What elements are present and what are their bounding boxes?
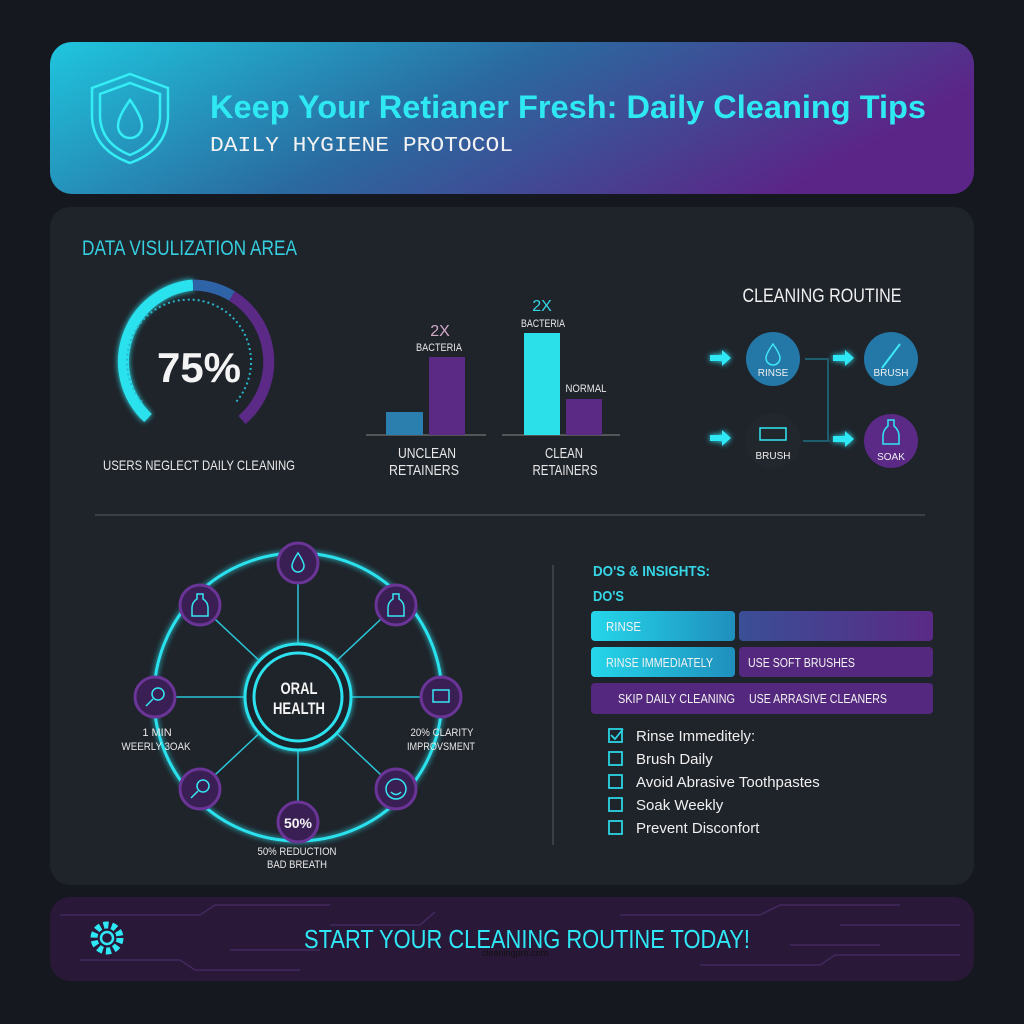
table rows: RINSE xyxy=(606,619,641,634)
gauge value: 75% xyxy=(157,344,241,391)
table rows: USE ARRASIVE CLEANERS xyxy=(749,691,887,706)
gauge chart xyxy=(103,285,295,473)
radial diagram: oral health: BAD BREATH xyxy=(267,859,327,871)
checklist: Prevent Disconfort xyxy=(636,820,760,837)
bar chart: 2X xyxy=(532,298,552,315)
checklist: Soak Weekly xyxy=(636,797,724,814)
radial diagram: oral health: 50% xyxy=(284,815,313,831)
radial diagram: oral health: 1 MIN xyxy=(142,727,172,739)
step: rinse: RINSE xyxy=(758,368,789,379)
radial diagram: oral health: ORAL xyxy=(280,679,318,698)
footer call to action xyxy=(50,897,974,981)
step: soak: SOAK xyxy=(877,452,905,463)
bar chart: CLEAN xyxy=(545,445,583,462)
radial diagram: oral health: HEALTH xyxy=(273,699,325,718)
do's and insights panel xyxy=(591,563,933,837)
cleaning routine flow: CLEANING ROUTINE xyxy=(742,286,902,307)
main panel xyxy=(50,207,974,885)
section heading: data visualization: DATA VISULIZATION AREA xyxy=(82,237,297,260)
table rows: SKIP DAILY CLEANING xyxy=(618,691,735,706)
subtitle: DAILY HYGIENE PROTOCOL xyxy=(210,135,513,158)
bar chart: RETAINERS xyxy=(389,462,459,479)
bar chart: BACTERIA xyxy=(521,318,566,330)
step: rinse xyxy=(746,332,800,386)
bar chart: BACTERIA xyxy=(416,342,463,354)
header banner xyxy=(50,42,974,194)
cta text: START YOUR CLEANING ROUTINE TODAY! xyxy=(304,924,750,954)
table rows xyxy=(591,611,933,714)
step: brush xyxy=(745,413,801,469)
radial diagram: oral health: 20% CLARITY xyxy=(410,727,474,739)
radial diagram: oral health: IMPROVSMENT xyxy=(407,741,475,753)
checklist: Avoid Abrasive Toothpastes xyxy=(636,774,820,791)
checklist: Brush Daily xyxy=(636,751,713,768)
icon: shield with drop xyxy=(92,74,168,163)
icon: gear xyxy=(94,925,120,951)
bar chart: RETAINERS xyxy=(532,462,598,479)
footer call to action: cleaningpro.com xyxy=(482,948,548,958)
bar chart: 2X xyxy=(430,323,450,340)
do's and insights panel: DO'S & INSIGHTS: xyxy=(593,563,710,580)
bar chart: NORMAL xyxy=(566,383,606,395)
step: brush: BRUSH xyxy=(755,451,791,462)
step: brush 2 xyxy=(864,332,918,386)
title: Keep Your Retianer Fresh: Daily Cleaning Tips xyxy=(210,89,926,125)
cleaning routine flow xyxy=(710,286,918,469)
step: soak xyxy=(864,414,918,468)
table rows: RINSE IMMEDIATELY xyxy=(606,655,713,670)
bar chart xyxy=(366,298,620,479)
step: brush 2: BRUSH xyxy=(873,368,909,379)
bar chart: UNCLEAN xyxy=(398,445,456,462)
radial diagram: oral health xyxy=(122,543,475,871)
gauge caption: USERS NEGLECT DAILY CLEANING xyxy=(103,457,295,473)
table rows: USE SOFT BRUSHES xyxy=(748,655,855,670)
do's and insights panel: DO'S xyxy=(593,588,624,605)
checklist xyxy=(609,728,820,837)
radial diagram: oral health: WEERLY 3OAK xyxy=(122,741,191,753)
radial diagram: oral health: 50% REDUCTION xyxy=(258,846,337,858)
checklist: Rinse Immeditely: xyxy=(636,728,755,745)
